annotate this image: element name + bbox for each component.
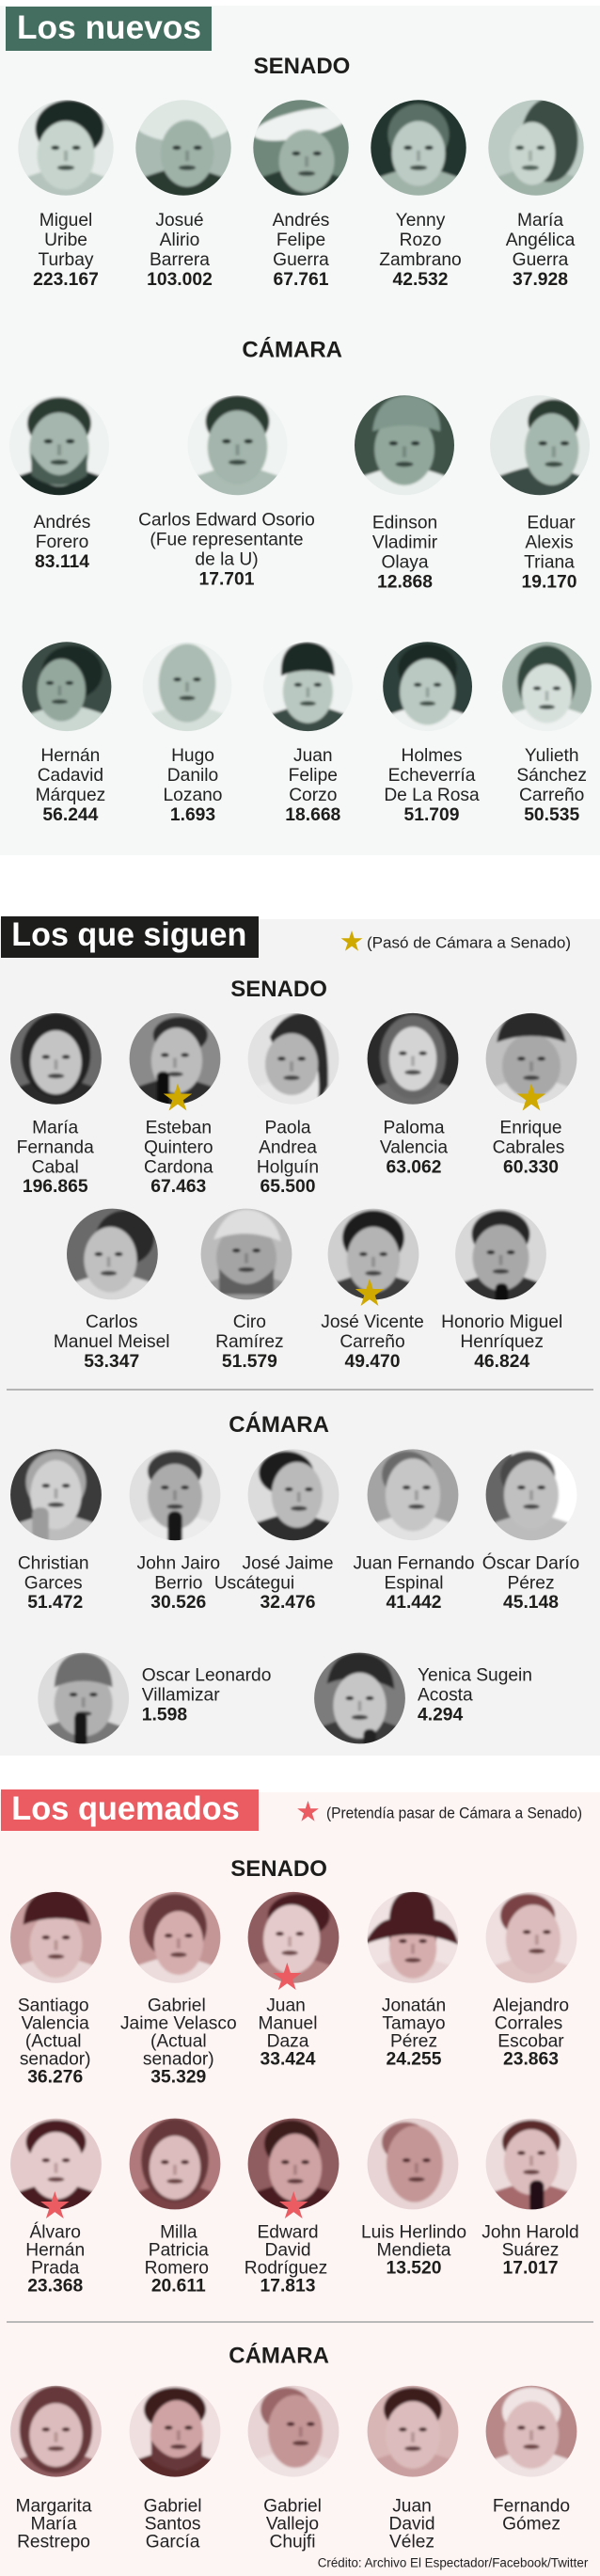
name and votes: David: [388, 2514, 435, 2534]
title: Los que siguen: Los que siguen: [11, 916, 246, 953]
name and votes: Uribe: [44, 231, 87, 250]
name and votes: Rozo: [400, 231, 441, 250]
name and votes: 45.148: [503, 1593, 559, 1613]
name and votes: 65.500: [261, 1177, 315, 1197]
name and votes: Romero: [145, 2258, 209, 2278]
name and votes: 1.693: [170, 805, 215, 825]
name and votes: Corrales: [495, 2013, 562, 2033]
name and votes: Daza: [267, 2031, 309, 2051]
name and votes: Uscátegui: [214, 1573, 294, 1593]
name and votes: [418, 1666, 532, 1725]
photo: [192, 1203, 301, 1309]
name and votes: 63.062: [387, 1157, 441, 1177]
candidate: Holmes Echeverría De La Rosa: [383, 642, 480, 820]
name and votes: Cardona: [144, 1157, 213, 1177]
name and votes: Luis Herlindo: [361, 2222, 466, 2242]
name and votes: 33.424: [261, 2049, 316, 2069]
name and votes: Quintero: [144, 1137, 213, 1157]
heading: Cámara: CÁMARA: [229, 2343, 329, 2369]
candidate: Juan Manuel Daza: [239, 1886, 348, 2069]
panel: Los nuevos: [0, 6, 600, 855]
photo: [477, 2113, 586, 2218]
candidate: María Angélica Guerra: [488, 100, 584, 285]
photo: [271, 642, 344, 732]
name and votes: 4.294: [418, 1705, 464, 1725]
candidate: Andrés Felipe Guerra: [253, 100, 349, 285]
photo: [150, 642, 224, 731]
name and votes: 20.611: [151, 2276, 206, 2296]
name and votes: Felipe: [276, 231, 325, 250]
name and votes: (Fue representante: [150, 531, 304, 550]
name and votes: García: [146, 2532, 200, 2552]
candidate: Paloma Valencia: [367, 1012, 459, 1172]
name and votes: Vladimir: [372, 533, 438, 553]
photo: [120, 1444, 229, 1550]
name and votes: Josué: [155, 211, 204, 231]
name and votes: 17.701: [199, 570, 255, 590]
name and votes: Esteban: [146, 1118, 212, 1137]
star: [40, 2191, 70, 2218]
name and votes: Manuel Meisel: [54, 1332, 170, 1352]
name and votes: Yenny: [396, 211, 446, 231]
name and votes: Vallejo: [266, 2514, 319, 2534]
candidate: Gabriel Santos García: [120, 2380, 229, 2552]
photo: [1, 1444, 111, 1550]
photo: [490, 395, 590, 495]
candidate: Edward David Rodríguez: [239, 2113, 348, 2296]
name and votes: Felipe: [289, 766, 338, 786]
name and votes: Alirio: [160, 231, 199, 250]
name and votes: 37.928: [513, 270, 568, 290]
name and votes: Corzo: [289, 786, 337, 805]
name and votes: Edward: [257, 2222, 319, 2242]
photo: [383, 642, 472, 726]
heading: Senado: SENADO: [230, 1856, 327, 1882]
name and votes: Tamayo: [382, 2013, 446, 2033]
name and votes: Jonatán: [382, 1996, 446, 2015]
name and votes: Carreño: [339, 1332, 405, 1352]
name and votes: 17.813: [261, 2276, 316, 2296]
photo: [371, 100, 466, 196]
name and votes: José Jaime: [242, 1553, 334, 1573]
candidate: María Fernanda Cabal: [10, 1012, 102, 1192]
name and votes: Margarita: [15, 2496, 92, 2516]
name and votes: José Vicente: [321, 1312, 424, 1332]
photo: [1, 2113, 111, 2218]
name and votes: Óscar Darío: [482, 1552, 579, 1573]
name and votes: 103.002: [147, 270, 213, 290]
name and votes: Suárez: [502, 2240, 559, 2260]
name and votes: Santiago: [18, 1996, 89, 2015]
name and votes: De La Rosa: [384, 786, 480, 805]
name and votes: 51.472: [27, 1593, 83, 1613]
name and votes: Angélica: [506, 231, 576, 250]
name and votes: [142, 1666, 271, 1725]
name and votes: John Harold: [482, 2222, 579, 2242]
candidate: Carlos Manuel Meisel: [54, 1203, 170, 1372]
candidate: José Vicente Carreño: [319, 1203, 428, 1372]
name and votes: 46.824: [474, 1352, 529, 1372]
name and votes: Andrés: [273, 211, 329, 231]
name and votes: Olaya: [381, 553, 429, 573]
photo: [355, 395, 454, 495]
name and votes: Milla: [160, 2222, 197, 2242]
name and votes: Carlos Edward Osorio: [138, 511, 315, 531]
name and votes: Restrepo: [17, 2532, 90, 2552]
name and votes: Christian: [18, 1553, 89, 1573]
name and votes: Villamizar: [142, 1686, 220, 1706]
name and votes: senador): [20, 2049, 91, 2069]
photo: [367, 1012, 459, 1105]
candidate: Gabriel Jaime Velasco: [120, 1886, 237, 2088]
name and votes: Vélez: [389, 2532, 434, 2552]
name and votes: Gabriel: [263, 2496, 322, 2516]
name and votes: Prada: [31, 2258, 80, 2278]
name and votes: Henríquez: [460, 1332, 544, 1352]
name and votes: 51.709: [404, 805, 459, 825]
name and votes: Zambrano: [379, 250, 462, 270]
photo: [253, 100, 349, 196]
name and votes: Turbay: [38, 250, 94, 270]
name and votes: Fernanda: [17, 1137, 94, 1157]
candidate: Christian Garces: [1, 1444, 111, 1613]
name and votes: Berrio: [154, 1573, 202, 1593]
name and votes: 32.476: [261, 1593, 316, 1613]
star: [517, 1084, 545, 1110]
candidate: Miguel Uribe Turbay: [19, 100, 113, 285]
candidate: Óscar Darío Pérez: [477, 1440, 586, 1613]
photo: [239, 1444, 348, 1550]
candidate: Oscar Leonardo Villamizar: [29, 1647, 271, 1753]
name and votes: Ciro: [233, 1312, 266, 1332]
photo: [488, 100, 584, 196]
name and votes: 23.368: [27, 2276, 83, 2296]
name and votes: 223.167: [33, 270, 99, 290]
name and votes: Triana: [524, 553, 575, 573]
candidate: Paola Andrea Holguín: [248, 1013, 339, 1192]
candidate: Andrés Forero: [19, 395, 100, 567]
name and votes: (Actual: [150, 2031, 207, 2051]
name and votes: Valencia: [380, 1137, 448, 1157]
name and votes: Márquez: [36, 786, 105, 805]
name and votes: Garces: [24, 1573, 83, 1593]
name and votes: Mendieta: [377, 2240, 451, 2260]
panel: Los quemados: [0, 1789, 600, 2576]
name and votes: Santos: [145, 2514, 200, 2534]
name and votes: Danilo: [167, 766, 218, 786]
candidate: Ciro Ramírez: [192, 1203, 301, 1372]
name and votes: Alexis: [525, 533, 574, 553]
name and votes: 24.255: [387, 2049, 442, 2069]
photo: [358, 2380, 467, 2486]
photo: [477, 1440, 586, 1550]
name and votes: 17.017: [503, 2258, 558, 2278]
photo: [446, 1203, 556, 1309]
name and votes: Manuel: [259, 2013, 317, 2033]
legend: red star: (Pretendía pasar de Cámara a Senado): [326, 1805, 582, 1821]
heading: Cámara: CÁMARA: [242, 336, 342, 362]
name and votes: John Jairo: [137, 1553, 220, 1573]
name and votes: Barrera: [150, 250, 210, 270]
name and votes: Gabriel: [144, 2496, 202, 2516]
photo: [358, 2113, 467, 2218]
photo: [1, 2380, 111, 2486]
name and votes: Eduar: [527, 514, 576, 533]
photo: [319, 1203, 428, 1309]
name and votes: 13.520: [387, 2258, 441, 2278]
name and votes: Valencia: [22, 2013, 89, 2033]
photo: [120, 1886, 229, 1992]
name and votes: María: [517, 211, 563, 231]
candidate: Yenny Rozo Zambrano: [371, 100, 466, 285]
candidate: Josué Alirio Barrera: [135, 100, 231, 285]
photo: [358, 1444, 467, 1550]
name and votes: Hernán: [40, 746, 100, 766]
name and votes: Miguel: [39, 211, 92, 231]
name and votes: Carreño: [519, 786, 584, 805]
photo: [477, 1886, 586, 1992]
heading: Senado: SENADO: [230, 977, 327, 1002]
candidate: Santiago Valencia: [1, 1886, 111, 2088]
photo: [23, 642, 111, 732]
photo: [358, 1886, 467, 1992]
name and votes: Andrés: [34, 513, 90, 533]
panel: Los que siguen: [0, 916, 600, 1756]
title: Los quemados: Los quemados: [11, 1790, 240, 1827]
photo: [120, 2380, 229, 2486]
name and votes: Yulieth: [525, 746, 579, 766]
candidate: Edinson Vladimir Olaya: [355, 395, 454, 587]
candidate: Enrique Cabrales: [485, 1012, 577, 1172]
name and votes: Pérez: [390, 2031, 437, 2051]
photo: [197, 395, 278, 495]
star: [355, 1279, 384, 1306]
name and votes: Hugo: [171, 746, 214, 766]
candidate: Fernando Gómez: [477, 2380, 586, 2534]
name and votes: David: [264, 2240, 311, 2260]
name and votes: Lozano: [164, 786, 222, 805]
name and votes: Forero: [36, 533, 88, 552]
name and votes: 19.170: [522, 573, 576, 593]
candidate: John Harold Suárez: [477, 2113, 586, 2278]
name and votes: Echeverría: [388, 766, 476, 786]
name and votes: Fernando: [493, 2496, 570, 2516]
photo: [120, 2113, 229, 2218]
name and votes: 23.863: [503, 2049, 559, 2069]
name and votes: Pérez: [507, 1573, 555, 1593]
star: [279, 2191, 308, 2218]
name and votes: Jaime Velasco: [120, 2013, 237, 2033]
name and votes: María: [30, 2514, 77, 2534]
photo: [239, 1886, 348, 1992]
name and votes: 53.347: [84, 1352, 139, 1372]
name and votes: Paola: [264, 1118, 311, 1137]
name and votes: Guerra: [513, 250, 569, 270]
name and votes: 67.761: [274, 270, 329, 290]
name and votes: Espinal: [385, 1573, 443, 1593]
name and votes: Yenica Sugein: [418, 1666, 532, 1686]
name and votes: 67.463: [150, 1177, 207, 1197]
candidate: Yulieth Sánchez Carreño: [502, 642, 592, 820]
name and votes: 18.668: [285, 805, 341, 825]
name and votes: Juan: [293, 746, 333, 766]
name and votes: Andrea: [259, 1137, 317, 1157]
name and votes: Sánchez: [516, 766, 587, 786]
heading: Cámara: CÁMARA: [229, 1411, 329, 1438]
legend: red star: [297, 1801, 582, 1821]
name and votes: Carlos: [86, 1312, 137, 1332]
name and votes: Juan: [392, 2496, 432, 2516]
photo: [10, 1012, 102, 1105]
name and votes: Oscar Leonardo: [142, 1666, 271, 1686]
photo: [239, 2113, 348, 2218]
star: [164, 1084, 192, 1110]
name and votes: 60.330: [503, 1157, 559, 1177]
photo: [130, 1012, 220, 1105]
name and votes: 50.535: [524, 805, 579, 825]
name and votes: 49.470: [345, 1352, 400, 1372]
name and votes: Alejandro: [493, 1996, 569, 2015]
name and votes: Guerra: [273, 250, 329, 270]
name and votes: Cabrales: [493, 1137, 564, 1157]
name and votes: 83.114: [35, 552, 89, 572]
name and votes: Enrique: [499, 1118, 562, 1137]
name and votes: 51.579: [222, 1352, 277, 1372]
title: Los nuevos: Los nuevos: [17, 9, 201, 46]
name and votes: 30.526: [150, 1593, 207, 1613]
name and votes: María: [32, 1118, 79, 1137]
name and votes: Álvaro: [30, 2222, 81, 2242]
photo: [57, 1203, 166, 1309]
name and votes: 42.532: [393, 270, 448, 290]
name and votes: Holmes: [401, 746, 463, 766]
credit: Crédito: Archivo El Espectador/Facebook/Twitter: [318, 2555, 589, 2569]
name and votes: Honorio Miguel: [441, 1312, 562, 1332]
candidate: Yenica Sugein Acosta: [305, 1647, 532, 1753]
candidate: Alejandro Corrales Escobar: [477, 1886, 586, 2069]
candidate: Gabriel Vallejo Chujfi: [239, 2380, 348, 2552]
candidate: Esteban Quintero Cardona: [130, 1012, 220, 1192]
candidate: Honorio Miguel Henríquez: [441, 1203, 562, 1372]
name and votes: Patricia: [149, 2240, 209, 2260]
star: [273, 1963, 302, 1990]
candidate: Álvaro Hernán Prada: [1, 2113, 111, 2296]
photo: [248, 1013, 339, 1105]
name and votes: Cadavid: [38, 766, 103, 786]
name and votes: 41.442: [387, 1593, 441, 1613]
name and votes: Chujfi: [269, 2532, 316, 2552]
name and votes: (Actual: [25, 2031, 82, 2051]
photo: [29, 1647, 138, 1753]
name and votes: de la U): [195, 550, 259, 570]
candidate: Jonatán Tamayo Pérez: [358, 1886, 467, 2069]
photo: [239, 2380, 348, 2486]
legend: gold star: (Pasó de Cámara a Senado): [367, 933, 571, 952]
candidate: José Jaime Uscátegui: [214, 1444, 348, 1613]
photo: [305, 1647, 415, 1753]
candidate: Margarita María Restrepo: [1, 2380, 111, 2552]
photo: [485, 1012, 577, 1104]
name and votes: 56.244: [42, 805, 99, 825]
name and votes: Juan: [266, 1996, 306, 2015]
name and votes: Ramírez: [215, 1332, 284, 1352]
name and votes: Rodríguez: [245, 2258, 327, 2278]
name and votes: 12.868: [377, 573, 433, 593]
photo: [502, 642, 592, 724]
photo: [477, 2380, 586, 2486]
candidate: Juan Fernando Espinal: [353, 1444, 475, 1613]
name and votes: senador): [143, 2049, 214, 2069]
name and votes: Acosta: [418, 1686, 473, 1706]
name and votes: Edinson: [372, 514, 437, 533]
name and votes: Holguín: [257, 1157, 319, 1177]
photo: [135, 100, 231, 196]
name and votes: 35.329: [150, 2068, 206, 2088]
candidate: Hernán Cadavid Márquez: [23, 642, 111, 820]
name and votes: Gómez: [502, 2514, 561, 2534]
name and votes: 196.865: [23, 1177, 88, 1197]
heading: Senado: SENADO: [254, 54, 350, 79]
candidate: Carlos Edward Osorio: [138, 390, 315, 590]
candidate: Juan Felipe Corzo: [271, 642, 344, 820]
name and votes: Cabal: [32, 1157, 79, 1177]
photo: [19, 395, 100, 495]
photo: [19, 100, 113, 196]
candidate: Juan David Vélez: [358, 2380, 467, 2552]
candidate: Eduar Alexis Triana: [490, 395, 590, 587]
photo: [1, 1886, 111, 1992]
candidate: Hugo Danilo Lozano: [150, 642, 224, 820]
candidate: Luis Herlindo Mendieta: [358, 2113, 467, 2278]
name and votes: Paloma: [383, 1118, 445, 1137]
name and votes: 36.276: [27, 2068, 83, 2088]
name and votes: Juan Fernando: [353, 1553, 475, 1573]
name and votes: Escobar: [497, 2031, 564, 2051]
name and votes: Gabriel: [148, 1996, 206, 2015]
name and votes: 1.598: [142, 1705, 187, 1725]
candidate: John Jairo Berrio: [120, 1444, 229, 1613]
name and votes: Hernán: [25, 2240, 85, 2260]
candidate: Milla Patricia Romero: [120, 2113, 229, 2296]
